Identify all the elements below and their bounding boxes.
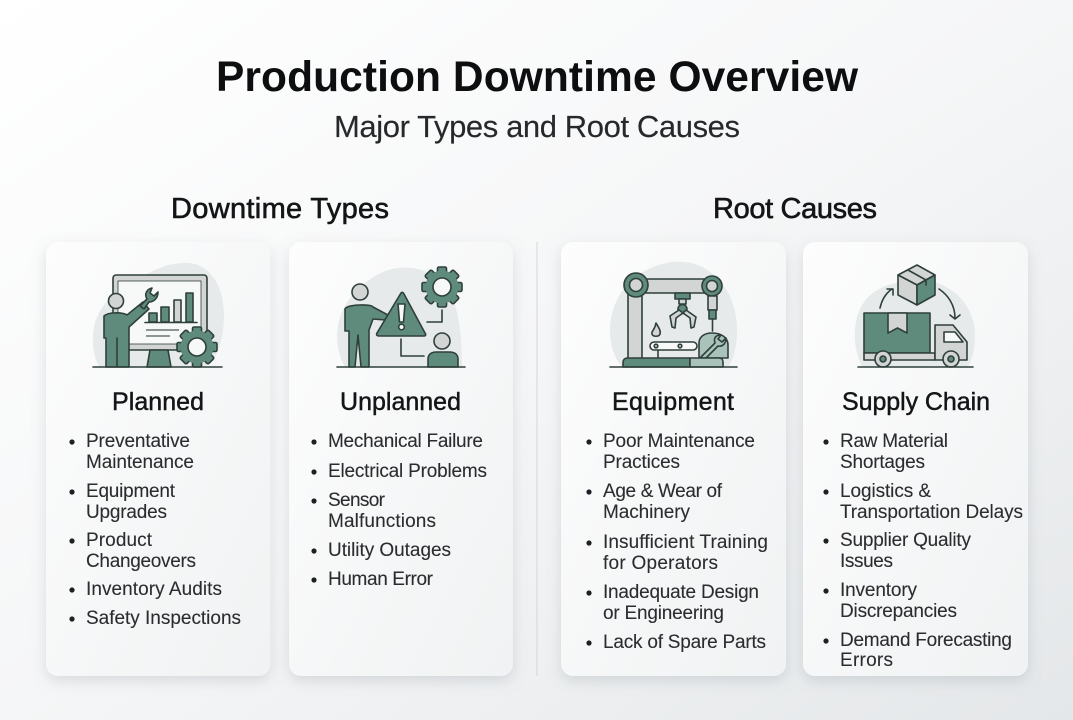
list: unplanned items: Malfunctions — [328, 511, 436, 532]
icon: worker with warning triangle — [337, 267, 465, 367]
list: unplanned items: Utility Outages — [328, 540, 451, 561]
panel: planned — [46, 242, 270, 676]
list: planned items: Upgrades — [86, 502, 167, 523]
list: planned items — [69, 431, 241, 629]
list: unplanned items: Human Error — [328, 569, 434, 590]
heading: planned: Planned — [112, 388, 204, 416]
list: supply chain items: Discrepancies — [840, 601, 957, 622]
list: equipment items: Practices — [603, 452, 680, 473]
heading: unplanned: Unplanned — [340, 388, 461, 416]
list: unplanned items: Sensor — [328, 490, 386, 511]
list: supply chain items: Errors — [840, 650, 893, 671]
list: supply chain items: Supplier Quality — [840, 530, 972, 551]
list: equipment items: Age & Wear of — [603, 481, 723, 502]
list: planned items: Preventative — [86, 431, 190, 452]
list: supply chain items: Raw Material — [840, 431, 948, 452]
heading: root causes: Root Causes — [713, 193, 877, 225]
panel: supply chain — [803, 242, 1028, 676]
list: planned items: Inventory Audits — [86, 579, 222, 600]
list: supply chain items — [823, 431, 1023, 671]
list: planned items: Product — [86, 530, 153, 551]
list: unplanned items: Electrical Problems — [328, 461, 487, 482]
subtitle: Major Types and Root Causes — [334, 109, 740, 144]
list: equipment items: Lack of Spare Parts — [603, 632, 766, 653]
list: planned items: Changeovers — [86, 551, 196, 572]
list: equipment items: for Operators — [603, 553, 718, 574]
list: equipment items: Poor Maintenance — [603, 431, 755, 452]
panel: unplanned — [289, 242, 513, 676]
heading: downtime types: Downtime Types — [171, 193, 389, 225]
heading: supply chain: Supply Chain — [842, 388, 990, 416]
icon: robotic arm and conveyor — [610, 262, 737, 367]
list: unplanned items: Mechanical Failure — [328, 431, 483, 452]
icon: delivery truck with box — [855, 265, 975, 367]
list: equipment items: Inadequate Design — [603, 582, 759, 603]
list: planned items: Equipment — [86, 481, 176, 502]
list: equipment items: or Engineering — [603, 603, 724, 624]
list: planned items: Safety Inspections — [86, 608, 241, 629]
list: supply chain items: Shortages — [840, 452, 925, 473]
title: Production Downtime Overview — [216, 54, 859, 101]
list: equipment items — [586, 431, 768, 653]
panel: equipment — [561, 242, 786, 676]
icon: technician with monitor and gear — [93, 263, 224, 367]
list: unplanned items — [311, 431, 487, 590]
heading: equipment: Equipment — [612, 388, 734, 416]
list: equipment items: Machinery — [603, 502, 690, 523]
list: supply chain items: Inventory — [840, 580, 918, 601]
list: supply chain items: Transportation Delays — [840, 502, 1023, 523]
list: supply chain items: Demand Forecasting — [840, 630, 1012, 651]
list: planned items: Maintenance — [86, 452, 194, 473]
list: equipment items: Insufficient Training — [603, 532, 768, 553]
list: supply chain items: Issues — [840, 551, 893, 572]
list: supply chain items: Logistics & — [840, 481, 931, 502]
